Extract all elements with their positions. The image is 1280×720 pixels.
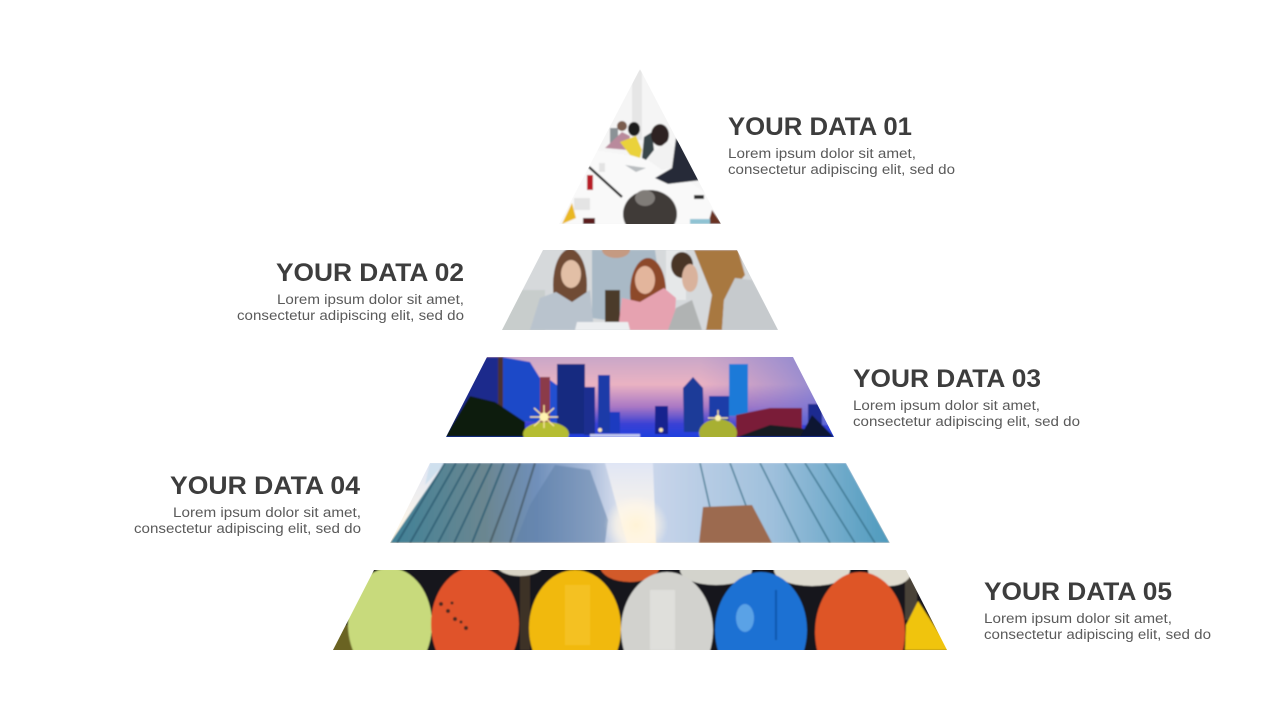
title 01: YOUR DATA 01: [728, 113, 912, 141]
title 05: YOUR DATA 05: [984, 578, 1172, 606]
text block 05: Lorem ipsum dolor sit amet,: [984, 611, 1172, 626]
title 03: YOUR DATA 03: [853, 365, 1041, 393]
text block 02: Lorem ipsum dolor sit amet,: [277, 292, 464, 307]
pyramid tier 3: city at dusk photo: [446, 357, 834, 437]
text block 02: [237, 292, 464, 323]
pyramid tier 1: meeting photo: [560, 70, 721, 224]
text block 01: consectetur adipiscing elit, sed do: [728, 162, 955, 177]
text block 02: consectetur adipiscing elit, sed do: [237, 308, 464, 323]
title 04: YOUR DATA 04: [170, 472, 360, 500]
text block 04: [134, 505, 361, 536]
text block 04: Lorem ipsum dolor sit amet,: [173, 505, 361, 520]
text block 01: Lorem ipsum dolor sit amet,: [728, 146, 916, 161]
pyramid tier 4: glass towers photo: [390, 463, 890, 543]
pyramid tier 2: team photo: [502, 250, 778, 330]
title 02: YOUR DATA 02: [276, 259, 464, 287]
text block 03: [853, 398, 1080, 429]
pyramid tier 5: hard hats photo: [333, 570, 947, 650]
text block 05: [984, 611, 1211, 642]
text block 05: consectetur adipiscing elit, sed do: [984, 627, 1211, 642]
text block 03: Lorem ipsum dolor sit amet,: [853, 398, 1040, 413]
text block 01: [728, 146, 955, 177]
text block 04: consectetur adipiscing elit, sed do: [134, 521, 361, 536]
text block 03: consectetur adipiscing elit, sed do: [853, 414, 1080, 429]
